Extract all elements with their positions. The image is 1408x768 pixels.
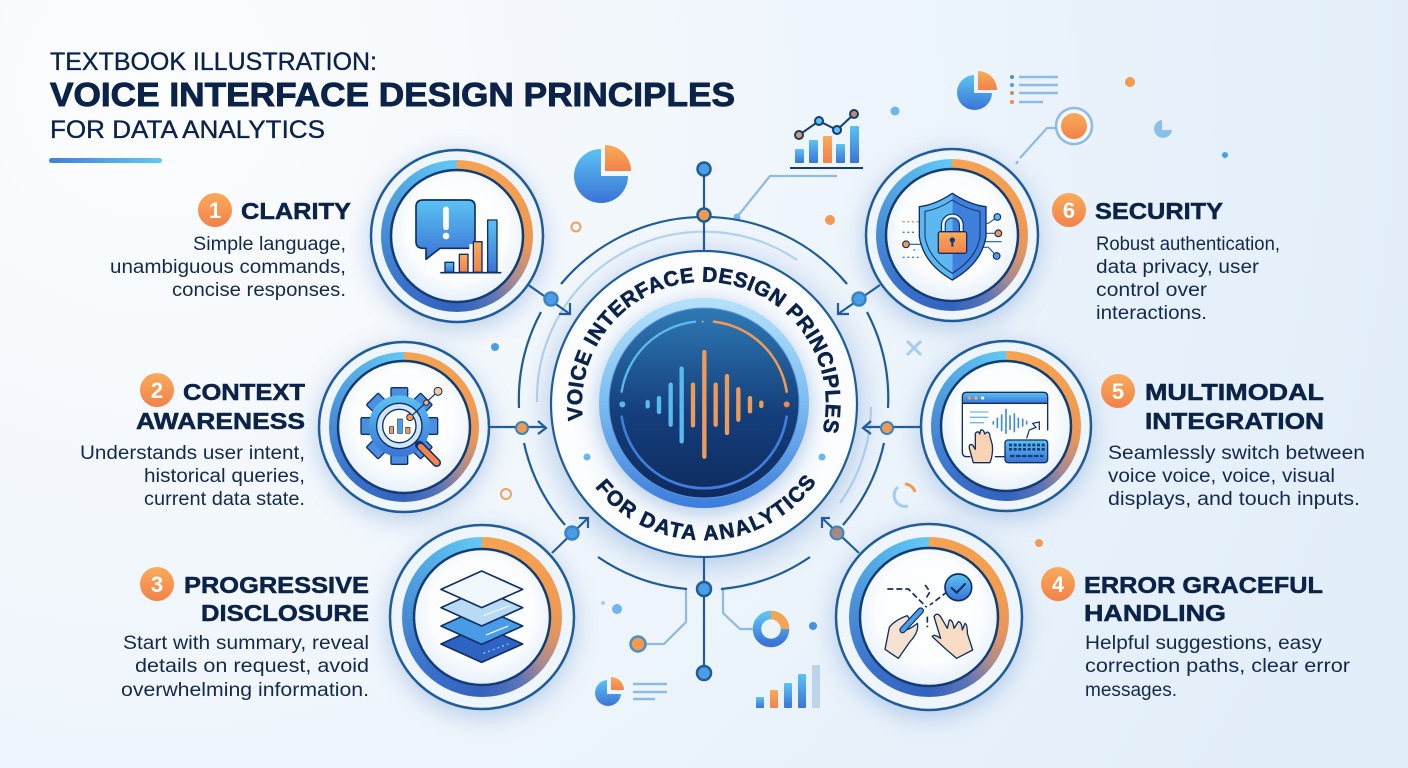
accent bar <box>49 158 162 163</box>
icon: gear with magnifier <box>361 387 442 464</box>
ring 1 <box>371 150 543 322</box>
description: context awareness <box>80 443 305 510</box>
badge 5 <box>1101 374 1135 408</box>
panel: 1 clarity <box>110 150 543 322</box>
ring 2 <box>319 342 489 512</box>
panel: 6 security <box>866 149 1280 324</box>
heading: context awareness: CONTEXT <box>183 379 305 405</box>
bottom left connector <box>630 589 686 652</box>
description: clarity: unambiguous commands, <box>110 257 346 278</box>
description: progressive disclosure <box>121 633 369 701</box>
description: clarity: concise responses. <box>172 280 346 301</box>
scattered dots <box>491 77 1228 630</box>
description: multimodal integration: displays, and touch inputs. <box>1108 489 1360 510</box>
description: security <box>1096 234 1280 324</box>
bottom right connector <box>723 589 753 629</box>
heading: multimodal integration: MULTIMODAL <box>1145 379 1324 405</box>
badge 3: 3 <box>151 572 163 597</box>
ring 4 <box>836 524 1022 710</box>
icon: pie and legend top right <box>957 71 1058 110</box>
panel: 3 progressive disclosure <box>121 525 574 709</box>
heading: multimodal integration <box>1145 379 1324 434</box>
badge 1 <box>198 193 232 227</box>
badge 6 <box>1052 193 1086 227</box>
badge 2: 2 <box>151 378 163 403</box>
ring 5 <box>921 341 1091 511</box>
description: context awareness: Understands user intent, <box>80 443 305 464</box>
icon: small light pie <box>1154 120 1172 138</box>
description: context awareness: current data state. <box>144 489 305 510</box>
heading: progressive disclosure <box>184 572 369 626</box>
description: multimodal integration: voice voice, voice, visual <box>1108 466 1335 487</box>
panel: 4 error graceful handling <box>836 524 1351 710</box>
hub dark face <box>609 308 799 498</box>
description: security: Robust authentication, <box>1096 234 1280 255</box>
title block <box>49 48 735 163</box>
panel: 2 context awareness <box>80 342 489 512</box>
icon: window with waveform, hand and keyboard <box>962 392 1048 463</box>
hub rim <box>599 298 809 508</box>
icon: large pie top <box>574 145 631 203</box>
heading: clarity: CLARITY <box>241 198 351 224</box>
circular subheading: FOR DATA ANALYTICS <box>595 475 815 541</box>
icon: donut <box>757 615 785 643</box>
connector network around hub <box>489 162 920 680</box>
hub white disc <box>551 251 857 557</box>
icon: voice waveform <box>619 321 790 488</box>
decorative data icons <box>491 71 1228 708</box>
icon: bar and line chart <box>790 110 863 168</box>
heading: progressive disclosure: PROGRESSIVE <box>184 572 369 598</box>
disc dots <box>584 454 826 460</box>
description: multimodal integration: Seamlessly switch between <box>1108 443 1365 464</box>
title line 3: FOR DATA ANALYTICS <box>50 116 325 144</box>
description: error graceful handling: messages. <box>1085 680 1177 701</box>
description: clarity <box>110 234 346 301</box>
icon: small pie and lines bottom <box>595 677 667 706</box>
description: multimodal integration <box>1108 443 1365 510</box>
panel: 5 multimodal integration <box>921 341 1365 511</box>
heading: context awareness <box>136 379 305 434</box>
heading: security: SECURITY <box>1095 198 1223 224</box>
description: security: control over <box>1096 280 1208 301</box>
badge 4 <box>1041 567 1075 601</box>
description: error graceful handling <box>1085 633 1351 701</box>
description: security: data privacy, user <box>1096 257 1260 278</box>
badge 1: 1 <box>209 198 221 223</box>
heading: multimodal integration: INTEGRATION <box>1145 408 1324 434</box>
icon: shield with padlock and circuits <box>903 193 1002 280</box>
heading: context awareness: AWARENESS <box>136 408 305 434</box>
icon: orange target with connector <box>1016 108 1092 164</box>
ring 3 <box>390 525 574 709</box>
circular heading: VOICE INTERFACE DESIGN PRINCIPLES <box>567 266 841 433</box>
badge 3 <box>140 567 174 601</box>
central hub <box>532 238 876 582</box>
heading: error graceful handling: HANDLING <box>1084 600 1226 626</box>
icon: gauge <box>894 484 915 506</box>
ring 6 <box>866 149 1038 321</box>
description: error graceful handling: correction paths, clear error <box>1085 656 1351 677</box>
description: progressive disclosure: Start with summary, reveal <box>123 633 369 654</box>
description: clarity: Simple language, <box>193 234 346 255</box>
icon: stacked layers <box>441 571 523 662</box>
description: progressive disclosure: overwhelming information. <box>121 680 369 701</box>
icon: x mark <box>907 341 921 355</box>
badge 6: 6 <box>1063 198 1075 223</box>
description: error graceful handling: Helpful suggestions, easy <box>1085 633 1323 654</box>
badge 2 <box>140 373 174 407</box>
icon: hands correcting with check mark <box>885 574 973 658</box>
heading: progressive disclosure: DISCLOSURE <box>201 600 369 626</box>
node on top connector <box>734 214 740 220</box>
title line 1: TEXTBOOK ILLUSTRATION: <box>50 48 377 76</box>
badge 4: 4 <box>1052 572 1065 597</box>
description: security: interactions. <box>1096 303 1207 324</box>
description: context awareness: historical queries, <box>144 466 305 487</box>
icon: speech bubble and bars <box>416 200 501 273</box>
heading: error graceful handling: ERROR GRACEFUL <box>1084 572 1323 598</box>
badge 5: 5 <box>1112 379 1124 404</box>
heading: error graceful handling <box>1084 572 1323 626</box>
description: progressive disclosure: details on request, avoid <box>135 656 369 677</box>
title line 2: VOICE INTERFACE DESIGN PRINCIPLES <box>50 77 735 114</box>
connector to top chart <box>737 176 837 217</box>
icon: bottom bars <box>756 665 820 708</box>
